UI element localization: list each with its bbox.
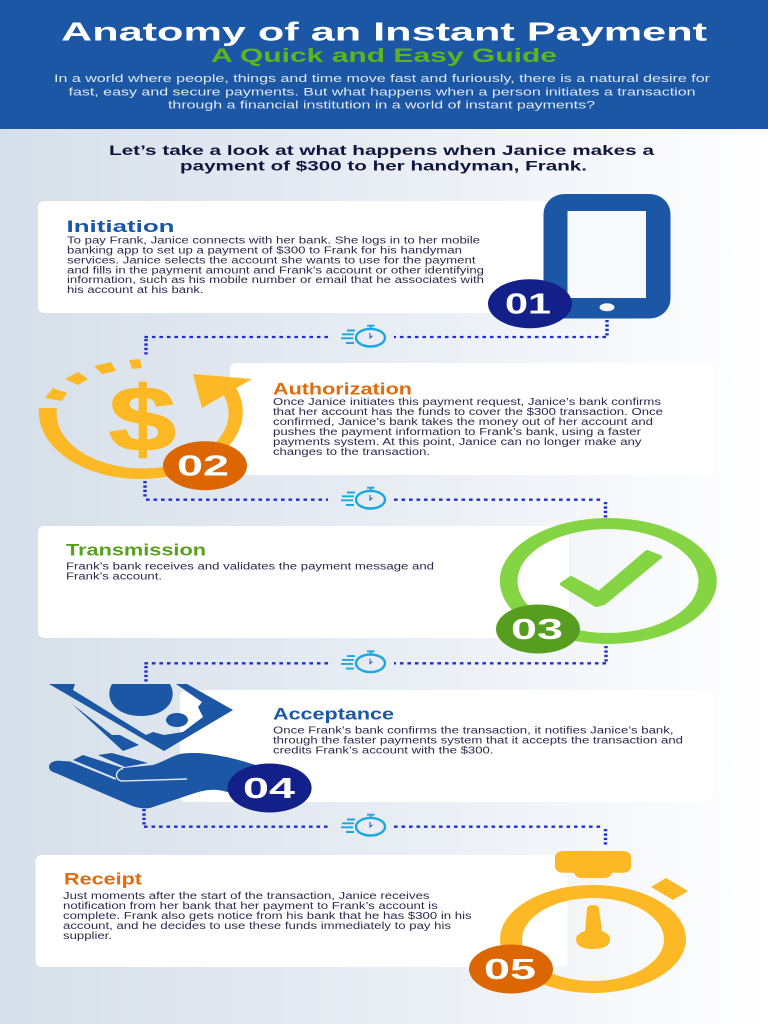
- icon: stopwatch large: [500, 851, 688, 993]
- text: initiation body: information, such as his mobile number or email that he associates with: [67, 275, 484, 286]
- text: receipt body: Just moments after the start of the transaction, Janice receives: [63, 891, 430, 902]
- panel: step 4 acceptance: [49, 684, 713, 812]
- text: authorization body: [273, 397, 664, 458]
- icon: dollar refresh: [39, 359, 252, 479]
- text: transmission body: [66, 561, 434, 582]
- text: authorization body: pushes the payment information to Frank’s bank, using a faster: [273, 427, 642, 438]
- text: receipt body: complete. Frank also gets notice from his bank that he has $300 in his: [63, 911, 472, 922]
- badge: 05: 05: [484, 954, 536, 986]
- lead-in heading: payment of $300 to her handyman, Frank.: [180, 158, 587, 174]
- icon: hand receiving money: [49, 684, 262, 808]
- subtitle: A Quick and Easy Guide: [211, 45, 557, 67]
- connector: step 2 to 3: [145, 481, 606, 518]
- connector: step 4 to 5: [144, 809, 606, 845]
- icon: dollar refresh: $: [109, 368, 176, 470]
- title: Anatomy of an Instant Payment: [61, 16, 708, 46]
- intro paragraph: through a financial institution in a world of instant payments?: [168, 99, 595, 111]
- text: authorization body: that her account has the funds to cover the $300 transaction. Once: [273, 407, 664, 418]
- text: transmission body: Frank’s bank receives and validates the payment message and: [66, 561, 434, 572]
- badge: 02: 02: [177, 451, 229, 483]
- text: initiation body: [67, 236, 484, 296]
- text: transmission body: Frank’s account.: [66, 571, 162, 582]
- text: receipt body: supplier.: [63, 931, 112, 942]
- badge: 03: 03: [511, 614, 563, 646]
- text: authorization body: changes to the transaction.: [273, 447, 430, 458]
- text: receipt body: account, and he decides to use these funds immediately to pay his: [63, 921, 451, 932]
- intro paragraph: In a world where people, things and time move fast and furiously, there is a natural desire for: [54, 73, 710, 85]
- badge: 02: [163, 441, 247, 490]
- connector: step 3 to 4: [144, 646, 606, 682]
- text: authorization body: Once Janice initiates this payment request, Janice’s bank confirms: [273, 397, 661, 408]
- badge: 03: [496, 604, 580, 654]
- panel: step 5 receipt: [36, 851, 688, 994]
- text: initiation body: services. Janice selects the account she wants to use for the payment: [67, 256, 476, 267]
- badge: 04: [228, 764, 312, 812]
- text: receipt body: notification from her bank that her payment to Frank’s account is: [63, 901, 438, 912]
- header band: [0, 0, 768, 129]
- panel: step 2 authorization: [39, 359, 713, 490]
- badge: 01: 01: [505, 289, 551, 321]
- heading: transmission: Transmission: [66, 540, 206, 559]
- heading: authorization: Authorization: [273, 380, 412, 399]
- text: acceptance body: Once Frank’s bank confirms the transaction, it notifies Janice’s bank,: [273, 725, 674, 736]
- text: initiation body: To pay Frank, Janice connects with her bank. She logs in to her mobile: [67, 236, 481, 247]
- badge: 01: [488, 279, 572, 328]
- text: acceptance body: credits Frank’s account with the $300.: [273, 745, 494, 756]
- intro paragraph: [54, 73, 710, 111]
- text: initiation body: and fills in the payment amount and Frank’s account or other identifying: [67, 265, 484, 276]
- text: acceptance body: [273, 725, 683, 756]
- panel: step 3 transmission: [38, 518, 717, 654]
- icon: stopwatch: [341, 651, 385, 672]
- icon: stopwatch: [341, 488, 385, 509]
- icon: check mark ring: [500, 518, 717, 644]
- panel: step 1 initiation: [38, 194, 670, 328]
- lead-in heading: Let’s take a look at what happens when Janice makes a: [109, 143, 655, 158]
- heading: acceptance: Acceptance: [273, 705, 394, 724]
- text: initiation body: his account at his bank.: [67, 285, 204, 296]
- text: receipt body: [63, 891, 472, 942]
- badge: 05: [469, 944, 553, 994]
- heading: receipt: Receipt: [64, 870, 142, 888]
- lead-in heading: [109, 143, 655, 174]
- icon: stopwatch: [341, 326, 385, 347]
- icon: stopwatch: [341, 815, 385, 836]
- text: authorization body: confirmed, Janice’s bank takes the money out of her account and: [273, 417, 653, 428]
- badge: 04: 04: [243, 773, 295, 805]
- heading: initiation: Initiation: [66, 217, 174, 236]
- intro paragraph: fast, easy and secure payments. But what happens when a person initiates a transaction: [68, 86, 696, 98]
- text: acceptance body: through the faster payments system that it accepts the transaction and: [273, 735, 683, 746]
- text: initiation body: banking app to set up a payment of $300 to Frank for his handyman: [67, 246, 462, 257]
- connector: step 1 to 2: [144, 320, 607, 356]
- icon: smartphone: [544, 194, 670, 318]
- text: authorization body: payments system. At this point, Janice can no longer make any: [273, 437, 642, 448]
